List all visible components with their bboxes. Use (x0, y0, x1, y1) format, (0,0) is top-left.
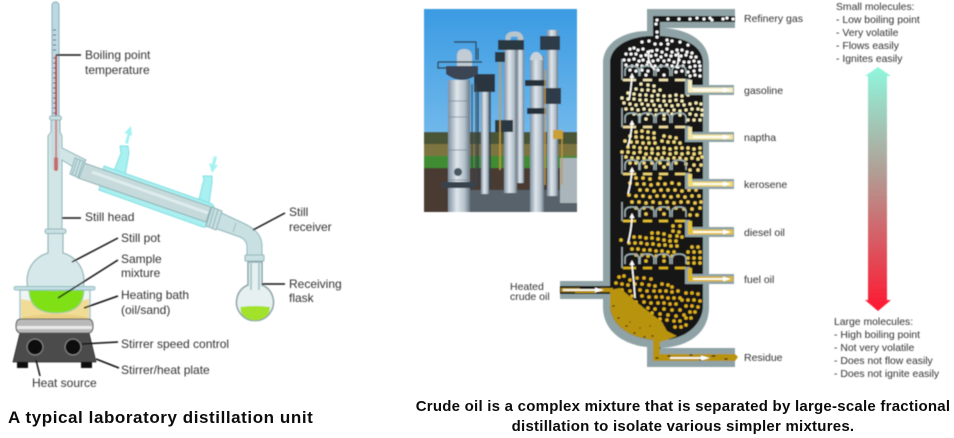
label: receiving flask: flask (289, 291, 315, 305)
label: heated crude oil: Heated (510, 281, 544, 293)
heading: crude oil caption: distillation to isolate various simpler mixtures. (512, 418, 854, 435)
icon: heating bath beaker (20, 290, 90, 325)
panel: laboratory distillation unit (13, 2, 342, 390)
icon: thermometer (52, 2, 59, 170)
label: naptha: naptha (744, 132, 776, 144)
label: still receiver: Still (289, 205, 308, 219)
diagram: fractional distillation column (560, 9, 738, 367)
label: stirrer speed control: Stirrer speed control (121, 337, 229, 351)
feed pipe interior (560, 286, 612, 294)
column interior (610, 16, 735, 361)
rising vapour arrows (628, 50, 679, 298)
heading: crude oil caption: Crude oil is a complex mixture that is separated by large-scale fractional (416, 398, 950, 415)
label: boiling point temperature: Boiling point (85, 48, 151, 62)
icon: receiving flask (237, 255, 274, 321)
text block: small molecules: - Low boiling point (836, 15, 920, 26)
label: heat source: Heat source (32, 376, 97, 390)
residue arrow (670, 356, 710, 360)
label: still receiver: receiver (289, 220, 332, 234)
icon: stirrer hot plate (13, 319, 96, 368)
label: refinery gas: Refinery gas (744, 13, 803, 25)
feed pipe shell (560, 281, 605, 299)
residue sludge (610, 288, 738, 361)
label: still head: Still head (85, 210, 134, 224)
trays (622, 59, 686, 268)
fuel oil draw pipe (685, 267, 734, 284)
arrow: molecule size gradient (865, 67, 891, 311)
label: residue: Residue (744, 352, 783, 364)
label: still pot: Still pot (121, 231, 161, 245)
text block: large molecules: - Not very volatile (834, 343, 914, 354)
label: diesel oil: diesel oil (744, 227, 785, 239)
heading: laboratory caption: A typical laboratory distillation unit (8, 408, 313, 427)
text block: large molecules: Large molecules: (834, 317, 913, 328)
icon: beaker rim (14, 286, 95, 290)
label: stirrer/heat plate: Stirrer/heat plate (121, 363, 210, 377)
text block: small molecules: Small molecules: (836, 2, 915, 13)
text block: large molecules: - Does not ignite easily (834, 369, 940, 380)
gasoline molecules (622, 84, 702, 120)
text block: small molecules: - Very volatile (836, 28, 899, 39)
naptha draw pipe (685, 126, 734, 142)
naptha molecules (622, 131, 702, 170)
label: heating bath: (oil/sand) (121, 303, 170, 317)
text block: large molecules: - Does not flow easily (834, 356, 934, 367)
photo: refinery towers (424, 9, 577, 212)
diesel draw pipe (685, 220, 734, 237)
icon: still head glassware (48, 116, 86, 231)
column shell (603, 9, 735, 367)
feed arrow (563, 288, 604, 292)
diesel molecules (621, 226, 700, 263)
label: heating bath: Heating bath (121, 288, 189, 302)
gasoline draw pipe (685, 79, 734, 95)
label: gasoline: gasoline (744, 85, 783, 97)
icon: condenser (70, 146, 214, 227)
label: sample mixture: Sample (121, 252, 162, 266)
label: fuel oil: fuel oil (744, 274, 774, 286)
icon: cooling water out arrow (124, 126, 132, 144)
text block: large molecules: - High boiling point (834, 330, 920, 341)
kerosene molecules (629, 178, 701, 215)
label: boiling point temperature: temperature (85, 63, 150, 77)
leader lines (36, 55, 285, 376)
kerosene draw pipe (685, 173, 734, 189)
feed stream (561, 288, 613, 293)
text block: small molecules: - Flows easily (836, 41, 900, 52)
label: heated crude oil: crude oil (510, 291, 550, 303)
fuel oil molecules (616, 276, 700, 327)
label: sample mixture: mixture (121, 266, 161, 280)
label: receiving flask: Receiving (289, 277, 342, 291)
white gas molecules (624, 18, 733, 76)
icon: still receiver (206, 207, 262, 256)
sludge specks (613, 306, 727, 360)
icon: still pot flask (27, 229, 84, 313)
text block: small molecules: - Ignites easily (836, 54, 903, 65)
icon: cooling water in arrow (209, 156, 218, 173)
label: kerosene: kerosene (744, 179, 787, 191)
